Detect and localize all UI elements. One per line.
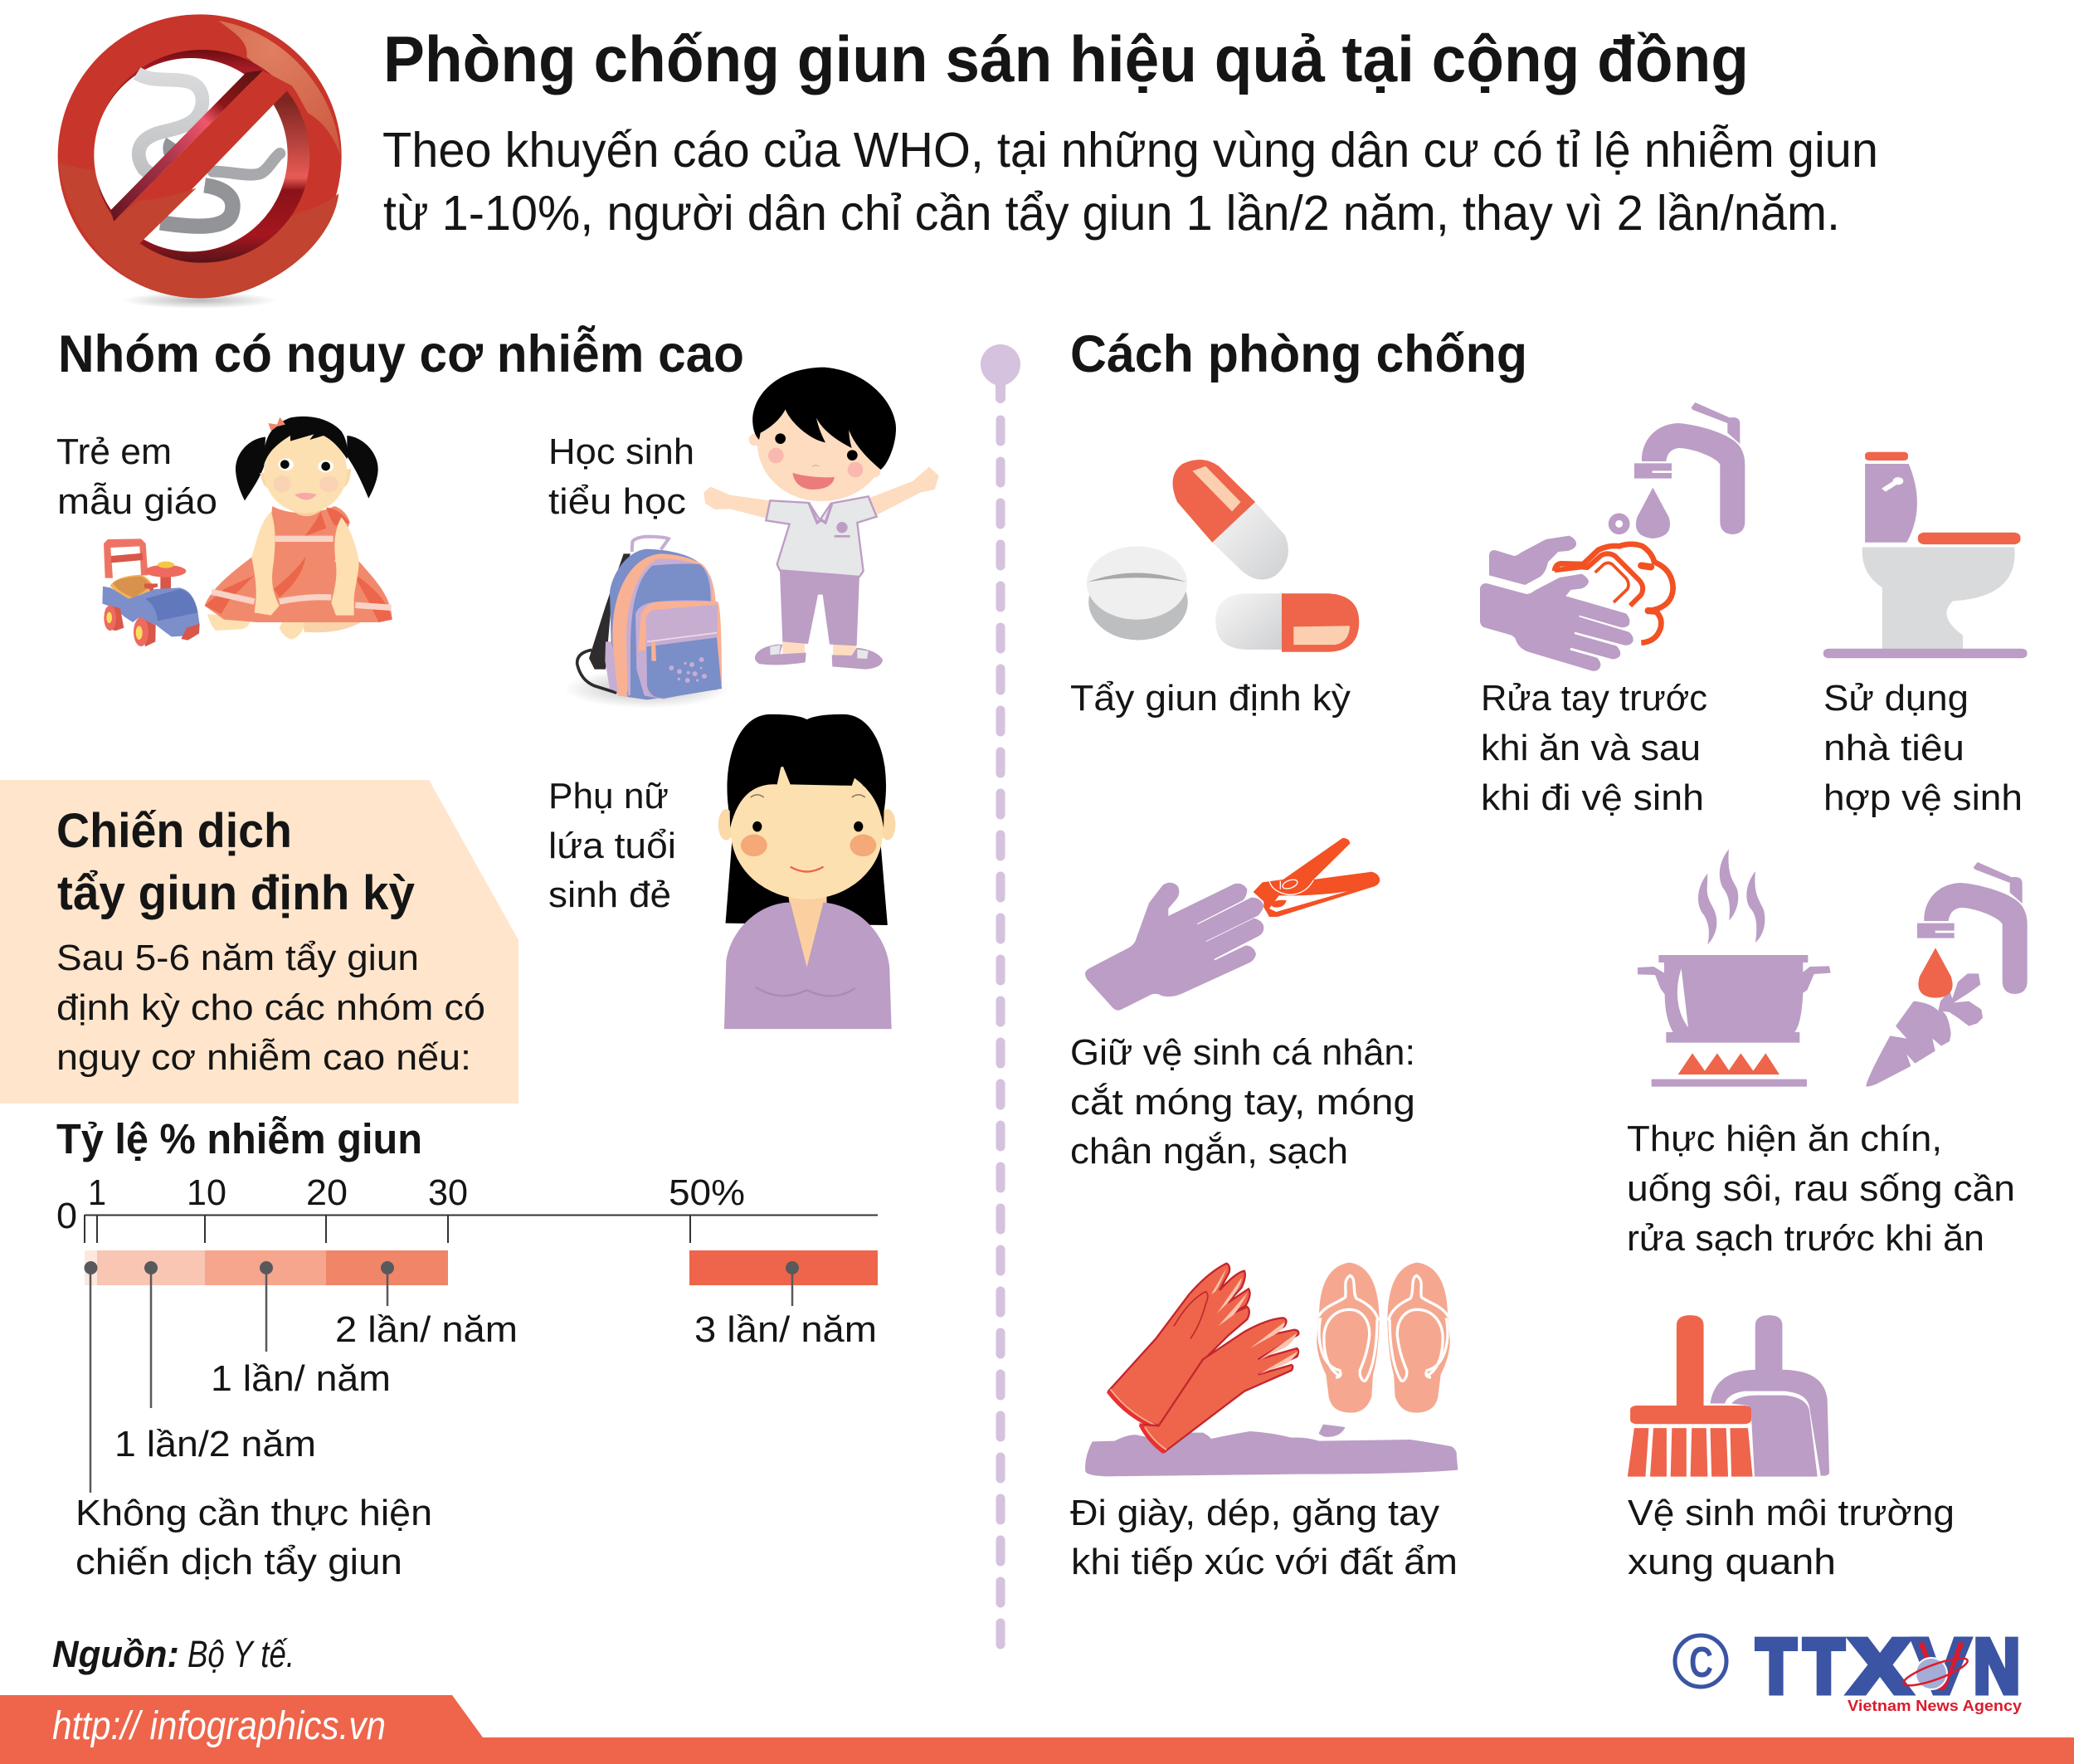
logo: copyright TTXVN: T bbox=[1756, 1623, 1796, 1709]
logo: copyright TTXVN: N bbox=[1974, 1623, 2020, 1709]
chart title: Tỷ lệ % nhiễm giun bbox=[56, 1115, 422, 1162]
logo: copyright TTXVN: T bbox=[1804, 1623, 1844, 1709]
label: primary school pupils: Học sinh bbox=[548, 431, 694, 472]
back glove bbox=[1108, 1264, 1250, 1429]
label: personal hygiene: cắt móng tay, móng bbox=[1070, 1082, 1415, 1123]
right sandal bbox=[1387, 1263, 1450, 1413]
source bbox=[52, 1633, 295, 1675]
intro text bbox=[382, 123, 1878, 241]
logo: copyright TTXVN bbox=[1675, 1623, 2022, 1714]
icon: toilet bbox=[1823, 452, 2027, 658]
campaign text: nguy cơ nhiễm cao nếu: bbox=[56, 1037, 471, 1078]
campaign heading: Chiến dịch bbox=[56, 804, 292, 858]
campaign text: định kỳ cho các nhóm có bbox=[56, 987, 485, 1028]
illustration: woman bbox=[718, 714, 895, 1029]
icon: nail clipping bbox=[1085, 838, 1380, 1011]
intro text: Theo khuyến cáo của WHO, tại những vùng dân cư có tỉ lệ nhiễm giun bbox=[382, 123, 1878, 178]
illustration: schoolboy with backpack bbox=[564, 368, 939, 708]
label: hygienic latrine: nhà tiêu bbox=[1823, 728, 1964, 768]
campaign heading bbox=[56, 804, 415, 920]
icon: no-worm prohibition sign bbox=[58, 14, 342, 309]
source: Nguồn: bbox=[52, 1633, 179, 1675]
icon: faucet and carrot bbox=[1866, 862, 2028, 1086]
icon: hand washing bbox=[1480, 402, 1745, 671]
icon: cooking pot bbox=[1638, 849, 1831, 1087]
label: preschool children: mẫu giáo bbox=[57, 481, 217, 522]
logo: copyright TTXVN: Vietnam News Agency bbox=[1848, 1698, 2022, 1714]
label: wear shoes and gloves: Đi giày, dép, găng tay bbox=[1070, 1493, 1439, 1533]
front glove bbox=[1141, 1318, 1298, 1452]
campaign panel bbox=[0, 780, 518, 1104]
footer url: http:// infographics.vn bbox=[52, 1704, 386, 1748]
campaign heading: tẩy giun định kỳ bbox=[57, 866, 415, 920]
girl bbox=[205, 417, 392, 640]
footer band bbox=[0, 1695, 2074, 1764]
logo: copyright TTXVN: V bbox=[1913, 1623, 1969, 1709]
divider: dashed vertical line bbox=[981, 344, 1020, 1649]
backpack bbox=[564, 537, 730, 708]
frequency labels: 1 lần/ năm bbox=[211, 1358, 391, 1399]
label: eat cooked food bbox=[1627, 1118, 2015, 1259]
label: hygienic latrine bbox=[1823, 678, 2023, 818]
logo: copyright TTXVN: C bbox=[1689, 1639, 1713, 1687]
label: preschool children bbox=[56, 431, 217, 522]
axis labels: 20 bbox=[306, 1172, 348, 1213]
label: clean surroundings: xung quanh bbox=[1628, 1542, 1836, 1582]
label: personal hygiene: chân ngắn, sạch bbox=[1070, 1131, 1348, 1172]
illustration: toddler girl with toy bbox=[102, 417, 392, 646]
frequency labels: Không cần thực hiện bbox=[75, 1493, 432, 1533]
heading: prevention: Cách phòng chống bbox=[1070, 325, 1527, 383]
label: wash hands: Rửa tay trước bbox=[1481, 678, 1707, 719]
label: hygienic latrine: Sử dụng bbox=[1823, 678, 1969, 719]
frequency labels bbox=[75, 1309, 877, 1582]
campaign text bbox=[56, 938, 485, 1078]
icon: pills bbox=[1087, 460, 1359, 652]
frequency labels: chiến dịch tẩy giun bbox=[75, 1542, 402, 1582]
label: primary school pupils bbox=[548, 431, 694, 522]
label: wear shoes and gloves: khi tiếp xúc với đất ẩm bbox=[1071, 1542, 1458, 1582]
label: women of reproductive age bbox=[548, 776, 676, 915]
frequency labels: 1 lần/2 năm bbox=[114, 1424, 316, 1464]
frequency labels: 3 lần/ năm bbox=[694, 1309, 877, 1350]
logo: copyright TTXVN: X bbox=[1849, 1623, 1911, 1709]
label: personal hygiene: Giữ vệ sinh cá nhân: bbox=[1070, 1032, 1415, 1073]
left sandal bbox=[1317, 1263, 1380, 1413]
label: wash hands: khi đi vệ sinh bbox=[1481, 777, 1704, 818]
campaign text: Sau 5-6 năm tẩy giun bbox=[56, 938, 419, 978]
label: women of reproductive age: Phụ nữ bbox=[548, 776, 669, 816]
label: wear shoes and gloves bbox=[1070, 1493, 1458, 1582]
intro text: từ 1-10%, người dân chỉ cần tẩy giun 1 lần/2 năm, thay vì 2 lần/năm. bbox=[383, 186, 1840, 241]
icon: broom and dustpan bbox=[1628, 1315, 1829, 1477]
frequency labels: 2 lần/ năm bbox=[335, 1309, 518, 1350]
axis bbox=[85, 1215, 878, 1243]
label: preschool children: Trẻ em bbox=[56, 431, 172, 472]
boy bbox=[704, 368, 939, 670]
axis labels: 30 bbox=[428, 1172, 468, 1213]
source: Bộ Y tế. bbox=[187, 1633, 295, 1675]
title: Phòng chống giun sán hiệu quả tại cộng đồng bbox=[383, 22, 1749, 95]
bars bbox=[85, 1250, 878, 1285]
icon: gloves and sandals on soil bbox=[1085, 1263, 1458, 1476]
label: wash hands: khi ăn và sau bbox=[1481, 728, 1701, 768]
toy car bbox=[102, 538, 200, 646]
label: eat cooked food: rửa sạch trước khi ăn bbox=[1627, 1218, 1984, 1259]
label: clean surroundings bbox=[1628, 1493, 1955, 1582]
label: women of reproductive age: sinh đẻ bbox=[548, 875, 671, 915]
label: women of reproductive age: lứa tuổi bbox=[548, 826, 676, 866]
chart: infection rate scale bbox=[56, 1115, 878, 1582]
label: clean surroundings: Vệ sinh môi trường bbox=[1628, 1493, 1955, 1533]
label: primary school pupils: tiểu học bbox=[548, 481, 686, 522]
leader lines and dots bbox=[85, 1261, 799, 1493]
label: wash hands bbox=[1481, 678, 1707, 818]
heading: high risk groups: Nhóm có nguy cơ nhiễm cao bbox=[58, 325, 744, 383]
axis labels: 0 bbox=[56, 1196, 77, 1236]
label: hygienic latrine: hợp vệ sinh bbox=[1823, 777, 2023, 818]
axis labels bbox=[56, 1172, 745, 1236]
axis labels: 1 bbox=[88, 1172, 106, 1213]
label: personal hygiene bbox=[1070, 1032, 1415, 1172]
axis labels: 50% bbox=[669, 1172, 745, 1213]
label: eat cooked food: uống sôi, rau sống cần bbox=[1627, 1168, 2015, 1209]
label: deworm regularly: Tẩy giun định kỳ bbox=[1070, 678, 1351, 719]
axis labels: 10 bbox=[187, 1172, 226, 1213]
label: eat cooked food: Thực hiện ăn chín, bbox=[1627, 1118, 1942, 1159]
